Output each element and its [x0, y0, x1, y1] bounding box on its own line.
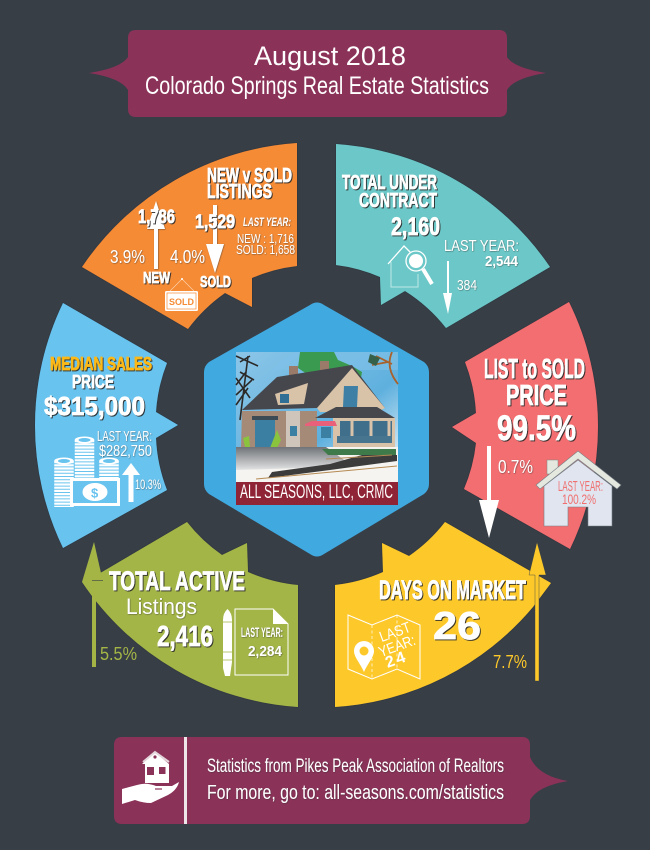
- text: last year value: [558, 478, 603, 507]
- panel: days on market: [335, 522, 551, 707]
- footer banner: [114, 737, 568, 824]
- icon: coins and bill: $: [91, 486, 99, 500]
- heading: price: PRICE: [72, 371, 114, 392]
- panel: new v sold listings: [82, 143, 297, 329]
- value: days: 26: [433, 605, 481, 648]
- last year figure: 2,544: [485, 253, 519, 270]
- text: last year value: [376, 619, 418, 672]
- icon: coins and bill: [54, 436, 120, 507]
- icon: pen: [223, 609, 232, 676]
- text: last year value: LAST YEAR:: [558, 478, 603, 495]
- value: list to sold: 99.5%: [497, 409, 576, 448]
- text: last year value: [241, 624, 283, 660]
- value: under contract: 2,160: [391, 213, 440, 241]
- value: sold listings: 1,529: [195, 212, 235, 233]
- text: last year value: LAST: [377, 619, 413, 646]
- arrow: new up: [147, 201, 165, 269]
- arrow: down: [443, 261, 452, 314]
- icon: sold sign: SOLD: [169, 297, 194, 307]
- title banner: [89, 30, 546, 117]
- heading: days on market: DAYS ON MARKET: [379, 575, 526, 605]
- text: last year value: LAST YEAR:: [241, 624, 283, 640]
- percent change: 5.5%: [100, 644, 137, 664]
- percent: sold: 4.0%: [170, 247, 205, 267]
- icon: house with last year: [536, 451, 621, 526]
- title: date: August 2018: [254, 41, 406, 71]
- footer text: For more, go to: all-seasons.com/statistics: [207, 781, 504, 804]
- heading: total under contract: [342, 172, 437, 212]
- last year figures: LAST YEAR:: [243, 215, 291, 229]
- arrow: up: [122, 463, 140, 502]
- arrow: up: [529, 542, 546, 681]
- icon: document with last year: [235, 609, 288, 675]
- arrow: up: [82, 542, 103, 667]
- footer text: [207, 756, 504, 804]
- name band: [236, 482, 398, 505]
- last year figure: $282,750: [99, 443, 152, 460]
- heading: total active: TOTAL ACTIVE: [109, 566, 245, 596]
- percent change: 7.7%: [493, 652, 527, 672]
- title: subtitle: Colorado Springs Real Estate Statistics: [145, 72, 489, 100]
- label: new: NEW: [143, 270, 171, 287]
- heading: listings: Listings: [126, 594, 197, 619]
- icon: house in hand: [122, 752, 179, 804]
- heading: new v sold: NEW v SOLD: [207, 165, 292, 187]
- icon: sold sign: [165, 278, 198, 311]
- last year figure: LAST YEAR:: [444, 238, 519, 255]
- footer text: Statistics from Pikes Peak Association of Realtors: [207, 756, 504, 777]
- percent change: 10.3%: [135, 476, 161, 492]
- last year figure: LAST YEAR:: [97, 428, 152, 445]
- heading: list to sold price: [484, 353, 585, 412]
- value: new listings: 1,786: [138, 207, 175, 228]
- icon: map with last year: [348, 615, 420, 679]
- arrow: sold down: [206, 205, 224, 273]
- house illustration: [236, 352, 398, 505]
- text: last year value: 24: [383, 649, 408, 672]
- heading: total under contract: TOTAL UNDER: [342, 172, 437, 194]
- heading: new v sold: LISTINGS: [207, 181, 272, 203]
- panel: total under contract: [336, 144, 550, 328]
- text: last year value: YEAR:: [376, 632, 418, 661]
- text: last year value: 2,284: [248, 643, 283, 660]
- arrow: down: [479, 446, 499, 538]
- panel: total active listings: [82, 522, 298, 707]
- last year figure: [444, 238, 519, 270]
- last year figures: [236, 215, 295, 257]
- percent: new: 3.9%: [110, 247, 145, 267]
- heading: new v sold: [207, 165, 292, 203]
- value: change: 384: [457, 277, 477, 294]
- percent change: 0.7%: [498, 457, 533, 477]
- last year figure: [97, 428, 152, 460]
- value: active listings: 2,416: [157, 621, 213, 653]
- panel: median sales price: [35, 303, 178, 548]
- label: sold: SOLD: [200, 274, 231, 291]
- last year figures: SOLD: 1,658: [236, 243, 295, 257]
- panel: list to sold price: [452, 302, 621, 549]
- heading: total under contract: CONTRACT: [359, 190, 437, 212]
- heading: median sales: MEDIAN SALES: [50, 353, 152, 374]
- name band: ALL SEASONS, LLC, CRMC: [240, 482, 393, 503]
- text: last year value: 100.2%: [562, 491, 596, 507]
- last year figures: NEW : 1,716: [237, 232, 294, 246]
- panel: center hexagon: [204, 302, 429, 556]
- value: median price: $315,000: [44, 391, 145, 421]
- heading: list to sold price: PRICE: [506, 380, 567, 412]
- icon: house with magnifier: [388, 246, 432, 287]
